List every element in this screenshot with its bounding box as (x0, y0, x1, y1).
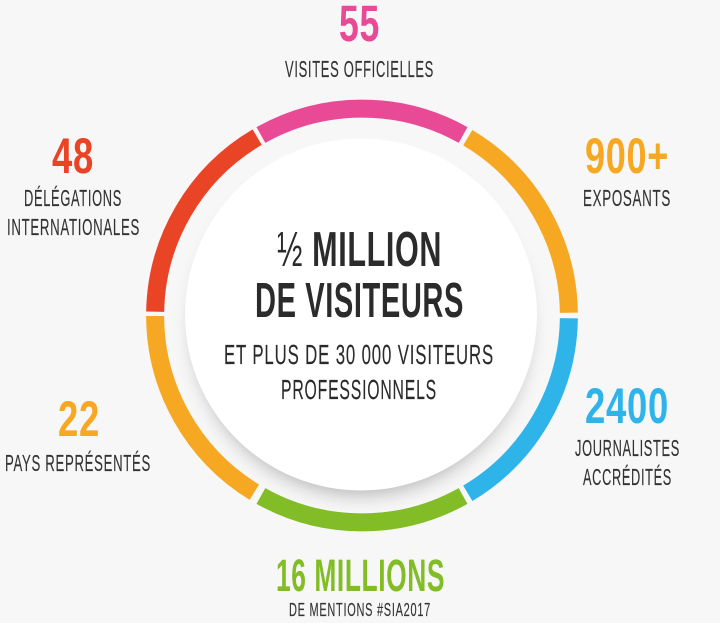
stat: delegations: DÉLÉGATIONS (24, 185, 122, 211)
center title: ½ MILLION (277, 223, 442, 277)
stat: delegations: 48 (52, 128, 94, 184)
stat: delegations: INTERNATIONALES (7, 214, 140, 240)
stat: pays: 22 (58, 391, 100, 447)
center title: DE VISITEURS (255, 274, 464, 328)
stat: journalistes (575, 378, 680, 490)
stat: delegations (7, 128, 140, 240)
ring segment: green (261, 496, 463, 522)
center white circle (185, 138, 537, 490)
stat: mentions: DE MENTIONS #SIA2017 (289, 600, 431, 620)
stat: mentions (276, 550, 445, 620)
center subtitle (224, 339, 494, 405)
center title (255, 223, 464, 328)
center subtitle: PROFESSIONNELS (281, 374, 437, 405)
ring segment: orange bottom left (132, 316, 254, 505)
ring segment: pink (261, 109, 463, 135)
stat: visites officielles: VISITES OFFICIELLES (285, 56, 434, 82)
stat: exposants (583, 128, 671, 211)
ring segment: blue (468, 318, 592, 506)
center circle shadow (193, 159, 529, 495)
stat: visites officielles (285, 0, 434, 82)
stat: mentions: 16 MILLIONS (276, 550, 445, 601)
stat: pays: PAYS REPRÉSENTÉS (5, 450, 151, 476)
ring segment: orange top right (468, 125, 592, 313)
stat: pays (5, 391, 151, 476)
stat: exposants: 900+ (585, 128, 669, 184)
ring segment: red (132, 124, 257, 312)
stat: journalistes: 2400 (585, 378, 669, 434)
ring (132, 109, 592, 522)
center subtitle: ET PLUS DE 30 000 VISITEURS (224, 339, 494, 370)
